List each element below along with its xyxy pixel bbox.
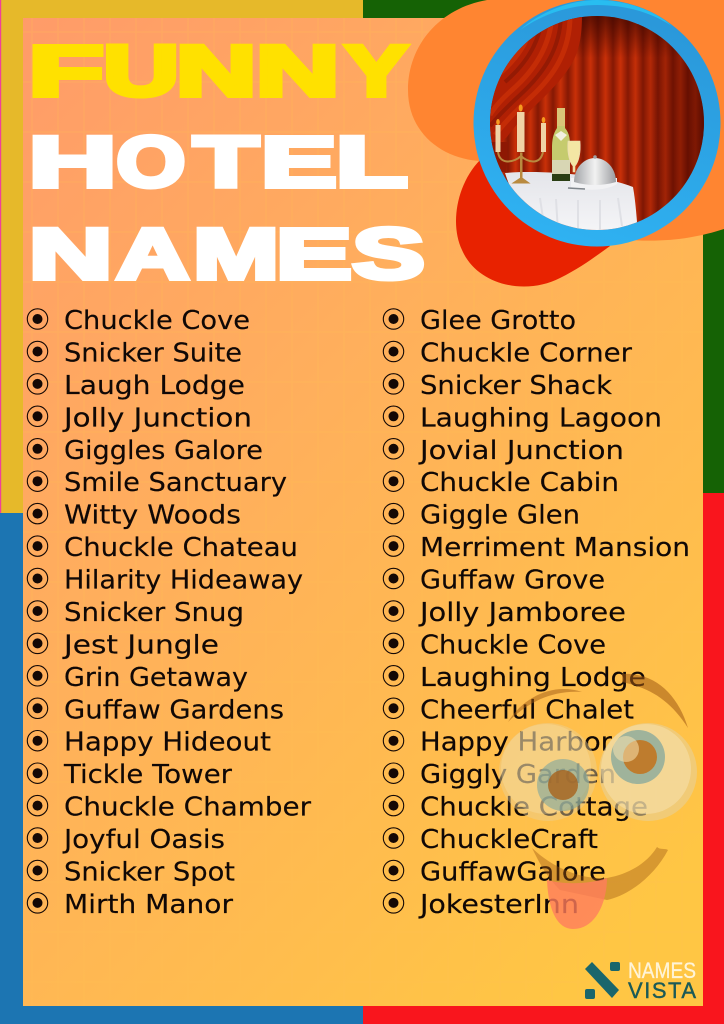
bullet icons — [27, 309, 404, 913]
tongue — [547, 878, 607, 929]
title word: HOTEL: L — [336, 124, 408, 202]
list column 2: hotel names: Merriment Mansion — [420, 533, 690, 563]
red blob — [456, 160, 610, 287]
candelabra — [496, 104, 546, 183]
left eye — [499, 723, 597, 821]
list column 2: hotel names: Happy Harbor — [420, 728, 613, 758]
list column 2: hotel names: Chuckle Cove — [420, 630, 606, 660]
curtain scene — [484, 14, 708, 240]
silver cloche — [568, 155, 617, 190]
list column 1: hotel names: Chuckle Cove — [64, 306, 250, 336]
list column 1: hotel names: Snicker Suite — [64, 338, 242, 368]
list column 2: hotel names: Guffaw Grove — [420, 566, 605, 596]
list column 2: hotel names: Snicker Shack — [420, 371, 612, 401]
list column 2: hotel names: ChuckleCraft — [420, 825, 598, 855]
list column 1: hotel names: Guffaw Gardens — [64, 695, 284, 725]
list column 1: hotel names: Hilarity Hideaway — [64, 566, 303, 596]
title word: FUNNY: F — [29, 32, 104, 112]
title word: HOTEL: T — [194, 124, 258, 202]
title word: NAMES: E — [276, 216, 352, 294]
list column 1: hotel names: Giggles Galore — [64, 436, 263, 466]
logo text: NAMES: NAMES — [628, 958, 696, 983]
left drape — [484, 14, 582, 150]
list column 2: hotel names: Chuckle Cottage — [420, 793, 648, 823]
list column 2: hotel names: Chuckle Cabin — [420, 468, 619, 498]
list column 2: hotel names: Giggle Glen — [420, 501, 580, 531]
title word: HOTEL: H — [29, 124, 116, 202]
title word: HOTEL: E — [261, 124, 336, 202]
title word: FUNNY: Y — [345, 32, 407, 112]
list column 1: hotel names: Tickle Tower — [63, 760, 233, 790]
list column 1: hotel names: Chuckle Chamber — [64, 793, 312, 823]
list column 1: hotel names: Witty Woods — [64, 501, 241, 531]
title — [29, 32, 424, 294]
list column 1: hotel names: Grin Getaway — [64, 663, 248, 693]
ring top highlight — [520, 0, 672, 30]
list column 2: hotel names: Laughing Lodge — [420, 663, 646, 693]
blue ring — [474, 0, 720, 246]
Names Vista logo — [585, 958, 696, 1003]
logo mark — [585, 962, 620, 999]
list column 1: hotel names: Snicker Spot — [64, 858, 235, 888]
smile — [532, 847, 668, 900]
list column 1: hotel names: Jest Jungle — [62, 630, 219, 660]
title word: FUNNY: N — [176, 32, 256, 112]
list column 2: hotel names: Cheerful Chalet — [420, 695, 634, 725]
list column 1: hotel names: Happy Hideout — [64, 728, 271, 758]
title word: FUNNY: N — [256, 32, 339, 112]
champagne bottle — [552, 108, 570, 181]
right eyebrow — [622, 674, 688, 728]
logo text: VISTA: VISTA — [628, 978, 696, 1003]
list column 1: hotel names: Laugh Lodge — [64, 371, 245, 401]
list column 2: hotel names: Jovial Junction — [418, 436, 624, 466]
title word: NAMES: A — [116, 216, 189, 294]
list column 1: hotel names — [62, 306, 312, 920]
list column 1: hotel names: Chuckle Chateau — [64, 533, 298, 563]
title word: HOTEL: O — [117, 124, 185, 202]
list column 2: hotel names — [418, 306, 690, 920]
right eye — [599, 723, 697, 821]
list column 2: hotel names: Chuckle Corner — [420, 338, 633, 368]
title word: FUNNY: U — [103, 32, 179, 112]
restaurant picture in blue ring — [474, 0, 720, 246]
title word: NAMES: S — [352, 216, 424, 294]
orange blob — [408, 0, 724, 241]
list column 1: hotel names: Snicker Snug — [64, 598, 244, 628]
table cloth — [505, 172, 637, 230]
title word: NAMES: M — [193, 216, 279, 294]
list column 2: hotel names: Laughing Lagoon — [420, 403, 662, 433]
title word: NAMES: N — [29, 216, 112, 294]
list column 2: hotel names: Giggly Garden — [420, 760, 616, 790]
list column 2: hotel names: Glee Grotto — [420, 306, 576, 336]
list column 1: hotel names: Smile Sanctuary — [64, 468, 287, 498]
faded emoji watermark — [499, 674, 697, 929]
left eyebrow — [508, 689, 582, 722]
list column 1: hotel names: Mirth Manor — [64, 890, 234, 920]
champagne glass — [568, 141, 580, 172]
list column 2: hotel names: Jolly Jamboree — [418, 598, 626, 628]
list column 1: hotel names: Joyful Oasis — [62, 825, 225, 855]
list column 2: hotel names: GuffawGalore — [420, 858, 606, 888]
list column 2: hotel names: JokesterInn — [418, 890, 579, 920]
list column 1: hotel names: Jolly Junction — [62, 403, 252, 433]
